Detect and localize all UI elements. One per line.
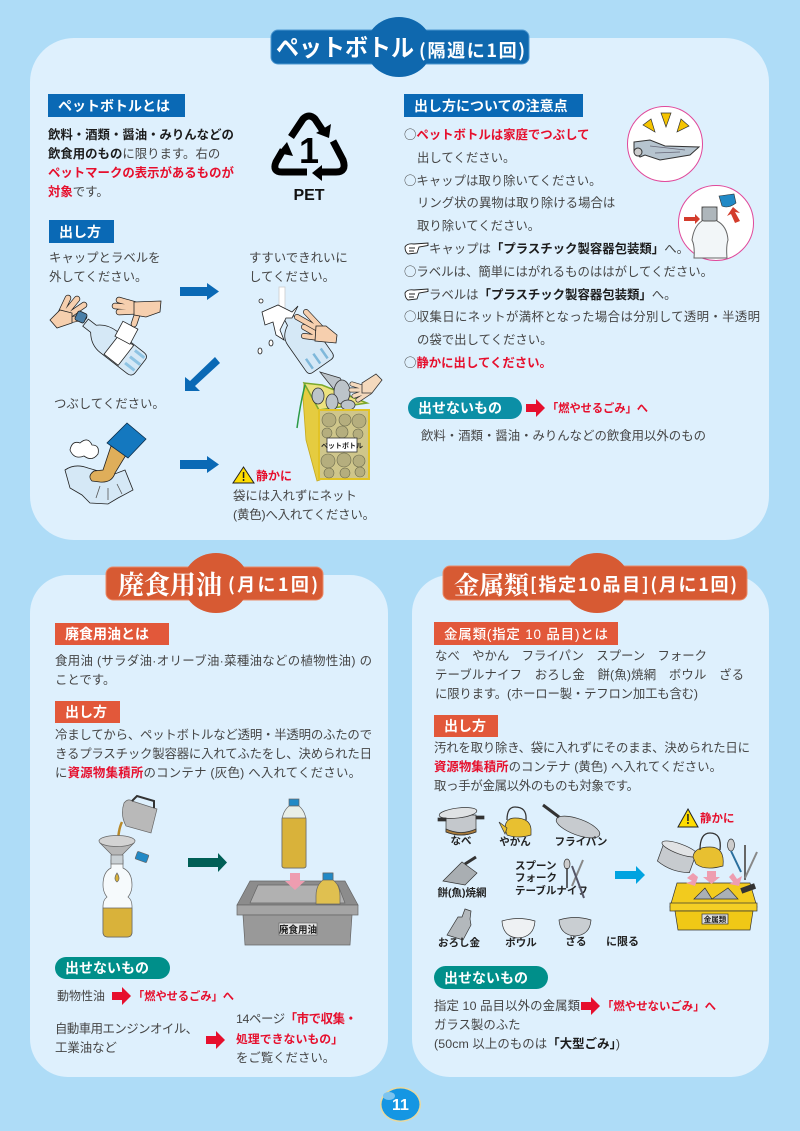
text: rinse: すすいできれいに [249,251,348,265]
text: notes list: 出してください。 [417,151,515,165]
item: cutlery labels [515,860,588,897]
title: metals [443,553,747,613]
item: grater: おろし金 [438,936,480,949]
illustration: oil bottle and grey crate [237,799,358,945]
text: oil definition [55,653,372,687]
title: PET bottles: (隔週に1回) [419,37,525,63]
icon: PET recycling mark: PET [293,187,325,204]
heading: what are metals [434,622,618,645]
illustration: pouring oil into bottle [99,796,157,937]
text: metal instructions [434,741,750,793]
heading: how to put out [49,220,114,243]
caution: quiet [678,809,734,827]
text: oil instructions: きるプラスチック製容器に入れてふたをし、決められた日 [55,747,372,761]
illustration: oil bottle and grey crate: 廃食用油 [279,924,317,936]
arrow: step 1 to step 2 [180,283,219,300]
heading: what are PET bottles: ペットボトルとは [58,98,170,114]
item: frying pan: フライパン [555,836,607,848]
heading: notes [404,94,583,117]
item: frying pan [543,805,607,848]
illustration: metal items [438,805,639,949]
item: cutlery [564,859,584,898]
illustration: rinsing bottle [258,287,337,375]
text: notes list: ○ラベルは、簡単にはがれるものははがしてください。 [404,262,713,280]
illustration: removing cap and label [50,298,161,377]
text: notes list: の袋で出してください。 [417,333,553,347]
text: oil definition: ことです。 [55,673,115,687]
label: limited to: に限る [606,935,639,948]
caution: quiet [233,467,292,483]
arrow: dark green [188,853,227,872]
text: crush: つぶしてください。 [54,397,165,411]
item: cutlery labels: スプーン [515,860,556,872]
text: metal items: なべ やかん フライパン スプーン フォーク [435,649,707,663]
item: colander [559,918,591,948]
heading: what is waste oil: 廃食用油とは [65,626,149,642]
text: see page 14: 14ページ「市で収集・ [236,1011,357,1026]
text: rinse [249,251,348,284]
arrow: red [112,987,131,1005]
illustration: yellow net bag [297,372,382,481]
text: metal items: に限ります。(ホーロー製・テフロン加工も含む) [435,687,698,701]
item: grill [438,857,486,899]
text: metal instructions: 汚れを取り除き、袋に入れずにそのまま、決められた日に [434,741,750,755]
text: into net: 袋には入れずにネット [233,489,357,503]
icon: crushed bottle circle [628,106,702,182]
text: metal items [435,649,744,701]
text: glass lids and large items [434,1018,620,1051]
title: PET bottles [271,17,529,77]
page number [380,1087,421,1122]
text: remove cap and label [49,251,161,284]
text: see page 14: 処理できないもの」 [236,1032,343,1046]
panel: waste cooking oil [30,553,388,1077]
item: grill: 餅(魚)焼網 [438,886,486,899]
title: waste oil [106,553,323,613]
arrow: red [206,1031,225,1049]
heading: what are metals: 金属類(指定 10 品目)とは [444,627,608,642]
text: PET definition: ペットマークの表示があるものが [48,165,234,180]
text: PET definition: 対象です。 [48,184,109,199]
label: not accepted: 出せないもの [65,960,149,976]
illustration: yellow crate with metals: 金属類 [704,914,727,924]
title: waste oil: (月に1回) [228,571,318,597]
text: non-burnable: 「燃やせないごみ」へ [602,999,716,1013]
arrow: step 3 to step 4 [180,456,219,473]
icon: PET recycling mark [275,116,344,204]
text: notes list: 取り除いてください。 [417,219,540,233]
text: into net: (黄色)へ入れてください。 [233,508,375,522]
icon: pointing hand [405,243,428,254]
heading: how to put out: 出し方 [65,704,107,720]
illustration: foot crushing bottle [65,423,146,504]
item: bowl: ボウル [505,937,537,949]
text: PET definition: 飲食用のものに限ります。右の [48,146,220,161]
text: metal items: テーブルナイフ おろし金 餅(魚)焼網 ボウル ざる [435,667,744,682]
text: engine oil: 工業油など [55,1040,118,1055]
text: glass lids and large items: ガラス製のふた [434,1018,520,1032]
heading: notes: 出し方についての注意点 [414,98,568,114]
text: engine oil: 自動車用エンジンオイル、 [55,1022,198,1036]
illustration: yellow crate with metals [655,833,757,930]
text: notes list [404,125,760,371]
title: waste oil: 廃食用油 [118,571,222,600]
arrow: cyan [615,866,645,884]
heading: how to put out [434,715,498,737]
text: other metals: 指定 10 品目以外の金属類 [434,998,581,1013]
text: glass lids and large items: (50cm 以上のものは「大型ごみ」) [434,1036,620,1051]
text: into net [233,489,375,522]
arrow: red [526,399,545,417]
text: notes list: ラベルは「プラスチック製容器包装類」へ。 [429,287,677,302]
text: burnable: 「燃やせるごみ」へ [133,989,234,1003]
text: remove cap and label: キャップとラベルを [49,251,161,265]
text: see page 14: をご覧ください。 [236,1050,335,1065]
heading: what are PET bottles [48,94,185,117]
label: not accepted [434,966,548,989]
title: metals: [指定10品目](月に1回) [530,571,737,597]
text: burnable: 「燃やせるごみ」へ [547,401,648,415]
caution: quiet: 静かに [700,811,734,825]
text: notes list: ○静かに出してください。 [404,353,552,371]
text: non-food: 飲料・酒類・醤油・みりんなどの飲食用以外のもの [421,428,706,443]
text: PET definition [48,127,234,199]
text: engine oil [55,1022,198,1055]
item: cutlery labels: フォーク [515,872,557,884]
icon: pointing hand [405,289,428,300]
page number: 11 [392,1097,409,1114]
label: not accepted [55,957,170,979]
icon: cap removal circle [678,186,754,260]
panel: PET bottles [30,17,769,540]
heading: how to put out: 出し方 [59,224,101,240]
label: not accepted: 出せないもの [444,970,528,986]
text: notes list: ○キャップは取り除いてください。 [404,171,602,189]
heading: how to put out [55,701,120,723]
arrow: red [581,997,600,1015]
title: metals: 金属類 [454,572,530,600]
heading: how to put out: 出し方 [444,718,486,734]
icon: PET recycling mark: 1 [299,130,319,171]
text: oil instructions [55,728,372,780]
text: remove cap and label: 外してください。 [49,270,147,284]
text: notes list: ○収集日にネットが満杯となった場合は分別して透明・半透明 [404,307,760,325]
item: bowl [502,918,537,949]
label: not accepted: 出せないもの [418,400,502,416]
arrow: step 2 to step 3 [185,357,220,391]
item: kettle [499,807,531,848]
label: not accepted [408,397,522,419]
heading: what is waste oil [55,623,169,645]
item: cutlery labels: テーブルナイフ [515,884,588,897]
text: oil instructions: に資源物集積所のコンテナ (灰色) へ入れてください。 [55,765,361,780]
panel: metals [412,553,769,1077]
text: metal instructions: 資源物集積所のコンテナ (黄色) へ入れてください。 [434,759,722,774]
illustration: yellow net bag: ペットボトル [321,441,363,450]
caution: quiet: 静かに [256,468,292,483]
left hand [50,298,84,328]
item: kettle: やかん [499,836,531,848]
text: notes list: ○ペットボトルは家庭でつぶして [404,125,590,143]
text: notes list: リング状の異物は取り除ける場合は [417,196,615,210]
item: grater [438,909,480,949]
right hand [115,300,161,324]
text: notes list: キャップは「プラスチック製容器包装類」へ。 [429,241,689,256]
text: metal instructions: 取っ手が金属以外のものも対象です。 [434,778,639,793]
text: PET definition: 飲料・酒類・醤油・みりんなどの [48,127,234,142]
text: oil definition: 食用油 (サラダ油·オリーブ油·菜種油などの植物性油) の [55,653,372,668]
item: pot: なべ [450,835,472,847]
item: colander: ざる [566,935,586,948]
text: oil instructions: 冷ましてから、ペットボトルなど透明・半透明のふたので [55,728,372,742]
text: see page 14 [236,1011,357,1065]
title: PET bottles: ペットボトル [276,35,414,62]
text: animal oil: 動物性油 [57,989,105,1003]
text: rinse: してください。 [249,270,335,284]
item: pot [438,806,484,847]
